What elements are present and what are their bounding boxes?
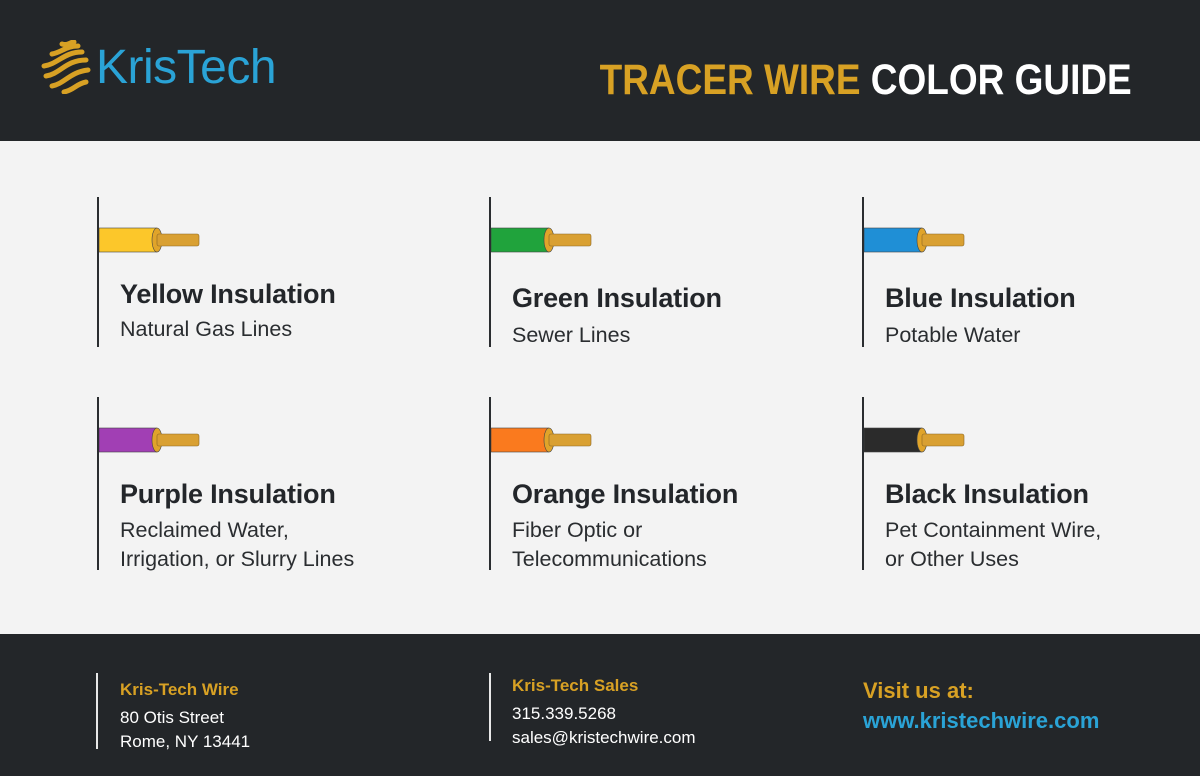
panel: black: Black Insulation [885, 479, 1089, 509]
footer: website: Visit us at: [863, 678, 974, 703]
panel: blue: Blue Insulation [885, 283, 1076, 313]
footer: sales: 315.339.5268 [512, 704, 616, 723]
panel: yellow: Yellow Insulation [120, 279, 336, 309]
panel: black: Pet Containment Wire, [885, 518, 1101, 542]
icon: logo waves [42, 40, 90, 94]
footer: website [863, 678, 1099, 733]
icon: blue wire [864, 228, 964, 252]
logo [42, 40, 276, 94]
panel: orange: Telecommunications [512, 547, 707, 571]
panel: purple: Purple Insulation [120, 479, 336, 509]
icon: purple wire [99, 428, 200, 452]
panel: green [489, 197, 809, 347]
icon: green wire [491, 228, 592, 252]
panel: purple: Irrigation, or Slurry Lines [120, 547, 354, 571]
header bar [0, 0, 1200, 141]
panel: black: or Other Uses [885, 547, 1019, 571]
panel: yellow [97, 197, 417, 347]
panel: green: Sewer Lines [512, 323, 630, 347]
footer: website: www.kristechwire.com [863, 708, 1099, 733]
footer: sales [489, 673, 749, 741]
icon: yellow wire [99, 228, 200, 252]
footer: address: 80 Otis Street [120, 708, 224, 727]
icon: black wire [864, 428, 964, 452]
panel: orange: Orange Insulation [512, 479, 738, 509]
footer: address: Kris-Tech Wire [120, 680, 239, 699]
panel: orange: Fiber Optic or [512, 518, 642, 542]
title: TRACER WIRE COLOR GUIDE [600, 56, 1132, 104]
footer: sales: sales@kristechwire.com [512, 728, 696, 747]
footer: address [96, 673, 346, 749]
logo text: KrisTech [96, 41, 276, 94]
footer: address: Rome, NY 13441 [120, 732, 250, 751]
footer bar [0, 634, 1200, 776]
footer: sales: Kris-Tech Sales [512, 676, 638, 695]
panel: blue: Potable Water [885, 323, 1020, 347]
panel: green: Green Insulation [512, 283, 722, 313]
panel: orange [489, 397, 809, 570]
panel: purple: Reclaimed Water, [120, 518, 289, 542]
panel: purple [97, 397, 417, 570]
icon: orange wire [491, 428, 592, 452]
panel: yellow: Natural Gas Lines [120, 317, 292, 341]
panel: black [862, 397, 1162, 570]
panel: blue [862, 197, 1162, 347]
